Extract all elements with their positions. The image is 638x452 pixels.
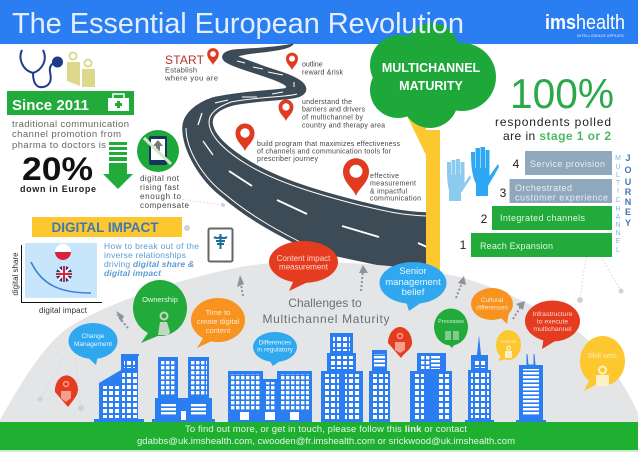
bubble: content impact measurement: measurement	[279, 262, 329, 272]
text: start	[164, 53, 218, 82]
vertical label: multichannel: T	[616, 180, 621, 187]
dotted connectors	[40, 198, 621, 408]
bubble: infrastructure: multichannel	[533, 326, 572, 333]
bubble: change management: Change	[82, 333, 105, 340]
journey step 3: customer experience	[515, 192, 608, 202]
stat: 20%: down in Europe	[20, 184, 96, 194]
chart: digital share vs impact: digital share	[11, 252, 20, 296]
icon: tablet with caduceus	[208, 228, 232, 262]
text: digital not rising fast: digital not	[140, 174, 180, 183]
vertical label: multichannel: L	[616, 247, 620, 254]
vertical label: journey: R	[625, 187, 632, 197]
pin: build	[236, 123, 254, 151]
red pins on road	[207, 48, 369, 196]
pin: outline	[286, 53, 298, 70]
text: effective measurement: communication	[370, 196, 421, 202]
text: outline reward: outline	[302, 62, 323, 68]
bubble: senior management belief: management	[385, 277, 441, 288]
heading: digital impact	[32, 217, 182, 237]
text: understand barriers	[302, 99, 385, 130]
arrow: down	[103, 142, 133, 189]
building 5	[369, 350, 390, 422]
vertical label: multichannel: N	[615, 230, 621, 237]
chart: digital share vs impact: digital impact	[39, 306, 88, 315]
bubble: differences in regulatory: Differences	[259, 340, 292, 346]
bubble: infrastructure: Infrastructure	[532, 311, 573, 318]
text: respondents polled	[495, 115, 611, 143]
building 7	[465, 335, 494, 422]
bubble: time to create digital content: create digital	[197, 317, 240, 326]
journey step 2: 2	[481, 212, 488, 226]
grey dome	[0, 262, 638, 425]
bubble: infrastructure: to execute	[537, 318, 568, 326]
text: respondents polled: respondents polled	[495, 115, 611, 129]
text: traditional promotion: pharma to doctors is	[12, 140, 106, 151]
tree crown	[370, 23, 496, 128]
journey step 1	[460, 233, 612, 257]
journey step 4: 4	[513, 157, 520, 171]
bubble: time to create digital content: content	[206, 326, 231, 335]
text: outline reward: reward &risk	[302, 70, 344, 76]
building 2	[152, 357, 215, 422]
text: challenges to multichannel maturity: Multichannel Maturity	[262, 312, 390, 326]
flag: UK	[56, 266, 72, 282]
text: build program	[257, 141, 400, 163]
text: digital not rising fast: rising fast	[140, 183, 180, 192]
text: respondents polled: are in stage 1 or 2	[503, 129, 611, 143]
banner: since 2011	[7, 91, 134, 115]
title: The Essential European Revolution	[12, 8, 464, 40]
text: build program: prescriber journey	[257, 156, 318, 163]
vertical label: journey: Y	[625, 218, 631, 228]
icon: crossed tablet	[137, 130, 179, 172]
bubble: cultural differences: differences	[476, 304, 509, 312]
building 6	[410, 353, 452, 422]
heading: digital impact: DIGITAL IMPACT	[52, 220, 159, 235]
text: digital not rising fast: enough to	[140, 192, 182, 201]
header band	[0, 0, 638, 44]
text: how to break out: inverse relationships	[104, 250, 186, 260]
icon: stethoscope	[20, 50, 62, 87]
bubble: senior management belief: belief	[402, 287, 425, 298]
bubble: time to create digital content: Time to	[206, 308, 230, 317]
text: traditional promotion: channel promotion from	[12, 129, 121, 140]
text: challenges to multichannel maturity	[262, 296, 390, 326]
text: understand barriers: understand the	[302, 99, 352, 106]
vertical label: multichannel: A	[616, 214, 621, 221]
icon: person	[596, 366, 609, 386]
bubble: change management: Management	[74, 341, 112, 348]
icon: person	[505, 346, 512, 358]
bubble: content impact measurement: Content impact	[277, 254, 331, 263]
tree	[370, 23, 496, 272]
vertical label: journey: N	[625, 197, 631, 207]
text: understand barriers: of multichannel by	[302, 114, 364, 122]
icon: two people	[445, 331, 459, 340]
icon: light blue glove	[447, 159, 471, 201]
bubble: infrastructure	[525, 300, 580, 349]
text: effective measurement	[370, 173, 421, 202]
dotted arrows	[116, 265, 525, 328]
pin: understand	[279, 100, 293, 121]
pin: start	[207, 48, 219, 65]
vertical label: journey: J	[625, 153, 631, 163]
journey step 3: Orchestrated	[515, 183, 572, 193]
bubble: content impact measurement	[269, 241, 338, 291]
tree trunk	[408, 118, 440, 272]
logo: imshealth: INTELLIGENCE APPLIED.	[577, 33, 625, 38]
pin: person centre	[388, 327, 412, 358]
road	[183, 44, 427, 275]
bubble: cultural differences	[471, 288, 513, 324]
pin: effective	[343, 158, 369, 196]
bubble: differences in regulatory	[253, 332, 297, 366]
vertical label: multichannel: N	[615, 222, 621, 229]
text: understand barriers: country and therapy area	[302, 122, 385, 130]
vertical label: journey: O	[624, 165, 632, 175]
journey step 1: Reach Expansion	[480, 241, 553, 251]
text: digital not rising fast: compensate	[140, 201, 190, 210]
text: effective measurement: measurement	[370, 180, 416, 188]
logo: imshealth: imshealth	[545, 12, 625, 34]
text: start: Establish	[165, 66, 197, 74]
chart: digital share vs impact	[11, 243, 102, 315]
text: how to break out: How to break out of the	[104, 241, 199, 251]
text: start: where you are	[164, 74, 218, 82]
text: effective measurement: & impactful	[370, 188, 407, 196]
journey step 3: 3	[500, 186, 507, 200]
footer	[0, 422, 638, 452]
journey step 4	[513, 151, 612, 175]
bubble: skill sets	[580, 336, 625, 391]
bubble: senior management belief	[380, 262, 446, 311]
tree label: MATURITY	[399, 79, 463, 93]
banner: since 2011: Since 2011	[12, 97, 89, 114]
tree label	[382, 61, 481, 93]
bubble: ownership: Ownership	[142, 295, 178, 304]
text: traditional promotion	[12, 119, 129, 151]
vertical label: multichannel: L	[616, 172, 620, 179]
text: effective measurement: effective	[370, 173, 399, 180]
text: build program: of channels and communication tools for	[257, 148, 392, 156]
vertical label: multichannel: I	[617, 188, 619, 195]
bubble: markets: Markets	[500, 339, 517, 344]
stat: 100%: 100%	[510, 70, 614, 117]
text: build program: build program that maximizes effectiveness	[257, 141, 400, 148]
journey step 2: Integrated channels	[500, 213, 586, 223]
bubble: senior management belief: Senior	[399, 266, 427, 277]
road edge lines	[186, 94, 427, 248]
vertical label: multichannel: C	[615, 197, 621, 204]
text: traditional promotion: traditional communication	[12, 119, 129, 130]
icon: first aid kit	[108, 94, 129, 111]
building 4	[321, 333, 363, 422]
text: outline reward	[302, 62, 344, 76]
text: start: START	[165, 53, 205, 67]
bubble: change management	[68, 323, 118, 365]
icon: person	[158, 312, 170, 335]
text: understand barriers: barriers and drivers	[302, 106, 366, 114]
tree label: MULTICHANNEL	[382, 61, 481, 75]
bubble: differences in regulatory: in regulatory	[257, 346, 294, 354]
icon: blue glove	[471, 147, 499, 196]
vertical label: journey: E	[625, 207, 631, 217]
text: how to break out: driving digital share &	[104, 259, 194, 269]
journey step 1: 1	[460, 238, 467, 252]
icon: doctors silhouette	[67, 52, 95, 87]
text: challenges to multichannel maturity: Challenges to	[288, 296, 362, 310]
stat: 20%: 20%	[22, 151, 93, 187]
road centre dashes	[198, 61, 427, 247]
text: digital not rising fast	[140, 174, 190, 210]
bubble: markets	[496, 330, 521, 361]
building 8	[516, 354, 546, 422]
bubble: processes	[434, 308, 468, 348]
bubble: ownership	[133, 280, 187, 343]
vertical label: multichannel: E	[616, 238, 621, 245]
bubble: cultural differences: Cultural	[481, 297, 504, 304]
bubble: time to create digital content	[191, 298, 245, 348]
text: how to break out	[104, 241, 199, 278]
decorative dots	[38, 203, 624, 411]
journey step 2	[481, 206, 612, 230]
text: how to break out: digital impact	[104, 268, 162, 278]
building 1	[94, 354, 144, 422]
building 3	[228, 371, 312, 422]
flag: Poland	[55, 244, 71, 260]
footer: To find out more, or get in touch, please follow this link or contact	[185, 424, 467, 435]
vertical label: multichannel: M	[615, 155, 621, 162]
vertical label: multichannel: U	[615, 164, 621, 171]
journey step 4: Service provision	[530, 159, 605, 169]
bubble: skill sets: Skill sets	[587, 351, 617, 360]
journey step 3	[500, 179, 612, 203]
pin: person left	[55, 375, 78, 407]
vertical label: multichannel: H	[615, 206, 621, 213]
vertical label: journey: U	[625, 177, 631, 187]
bubble: processes: Processes	[438, 319, 464, 325]
footer: gdabbs@uk.imshealth.com, cwooden@fr.imshealth.com or srickwood@uk.imshealth.com	[137, 436, 515, 447]
